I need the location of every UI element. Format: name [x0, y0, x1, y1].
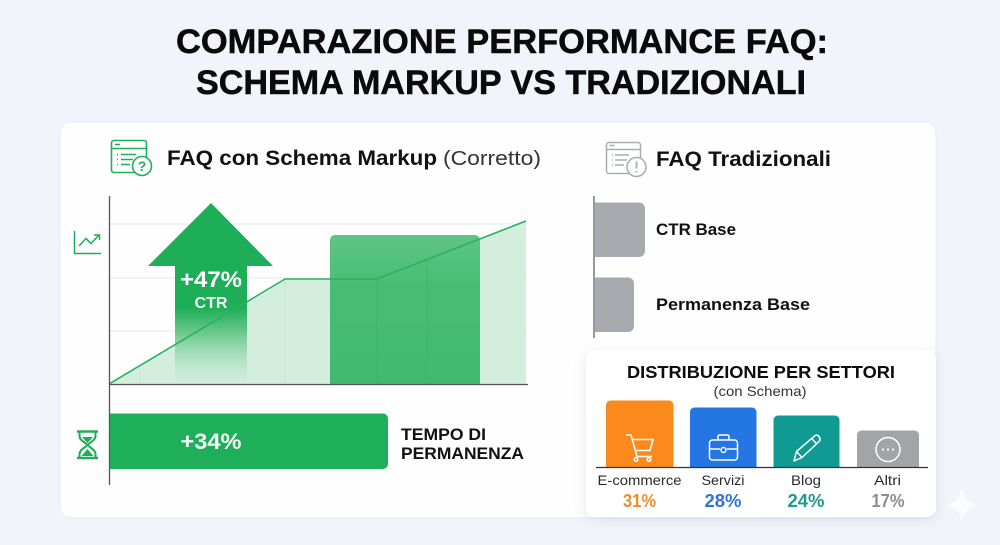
- bar: servizi: [690, 408, 756, 468]
- bar: altri: [857, 430, 919, 468]
- title: [176, 23, 828, 102]
- icon: FAQ page with warning: [606, 142, 646, 176]
- label: tempo di permanenza: PERMANENZA: [401, 445, 524, 463]
- bar: permanenza base: [595, 278, 634, 332]
- labels: sectors: Blog: [791, 472, 821, 488]
- panel: FAQ con Schema Markup: [74, 140, 541, 485]
- title: SCHEMA MARKUP VS TRADIZIONALI: [196, 64, 806, 102]
- arrow: +47% CTR: CTR: [194, 295, 228, 312]
- values: sector percentages: 31%: [623, 491, 656, 511]
- chart: CTR growth: [109, 203, 528, 384]
- arrow: +47% CTR: +47%: [180, 267, 242, 292]
- bar: e-commerce: [606, 400, 674, 468]
- icon: sparkle watermark: [948, 489, 976, 520]
- bar: CTR base: [595, 202, 645, 257]
- bar: +34% tempo di permanenza: +34%: [180, 429, 242, 454]
- icon: pencil: [794, 435, 820, 461]
- label: tempo di permanenza: [401, 426, 524, 463]
- panel: distribuzione per settori: [586, 350, 936, 517]
- icon: trend chart: [74, 231, 101, 254]
- baseline: [596, 466, 928, 468]
- heading: FAQ con Schema Markup: FAQ con Schema Markup: [167, 147, 437, 170]
- axis: [593, 196, 595, 338]
- labels: sectors: Altri: [874, 472, 901, 488]
- labels: sectors: [598, 472, 901, 488]
- title: COMPARAZIONE PERFORMANCE FAQ:: [176, 23, 828, 61]
- values: sector percentages: [623, 491, 904, 511]
- values: sector percentages: 28%: [704, 491, 742, 511]
- axes: [109, 196, 528, 485]
- labels: sectors: Servizi: [702, 472, 744, 488]
- heading note: Corretto: (Corretto): [443, 147, 541, 170]
- subheading: con schema: (con Schema): [714, 383, 806, 399]
- values: sector percentages: 17%: [872, 491, 904, 511]
- label: CTR base: CTR Base: [656, 221, 736, 239]
- icon: more dots: [876, 438, 900, 462]
- panel: main comparison card: [60, 122, 936, 518]
- icon: FAQ page with question mark: ?: [138, 158, 146, 174]
- heading: distribuzione per settori: DISTRIBUZIONE PER SETTORI: [627, 362, 895, 382]
- icon: briefcase: [710, 435, 738, 460]
- label: tempo di permanenza: TEMPO DI: [401, 426, 486, 444]
- arrow: +47% CTR: [148, 203, 273, 384]
- bar: blog: [774, 416, 840, 468]
- panel: FAQ Tradizionali: [594, 142, 831, 338]
- heading: FAQ Tradizionali: FAQ Tradizionali: [656, 148, 831, 171]
- labels: sectors: E-commerce: [598, 472, 682, 488]
- values: sector percentages: 24%: [788, 491, 824, 511]
- trend line: [109, 221, 526, 384]
- icon: hourglass: [77, 432, 98, 458]
- chart area: [109, 221, 526, 384]
- bar: +34% tempo di permanenza: [110, 414, 388, 469]
- bar: highlighted green: [330, 235, 480, 384]
- label: permanenza base: Permanenza Base: [656, 296, 810, 314]
- icon: FAQ page with question mark: [112, 140, 152, 176]
- icon: cart: [626, 435, 653, 461]
